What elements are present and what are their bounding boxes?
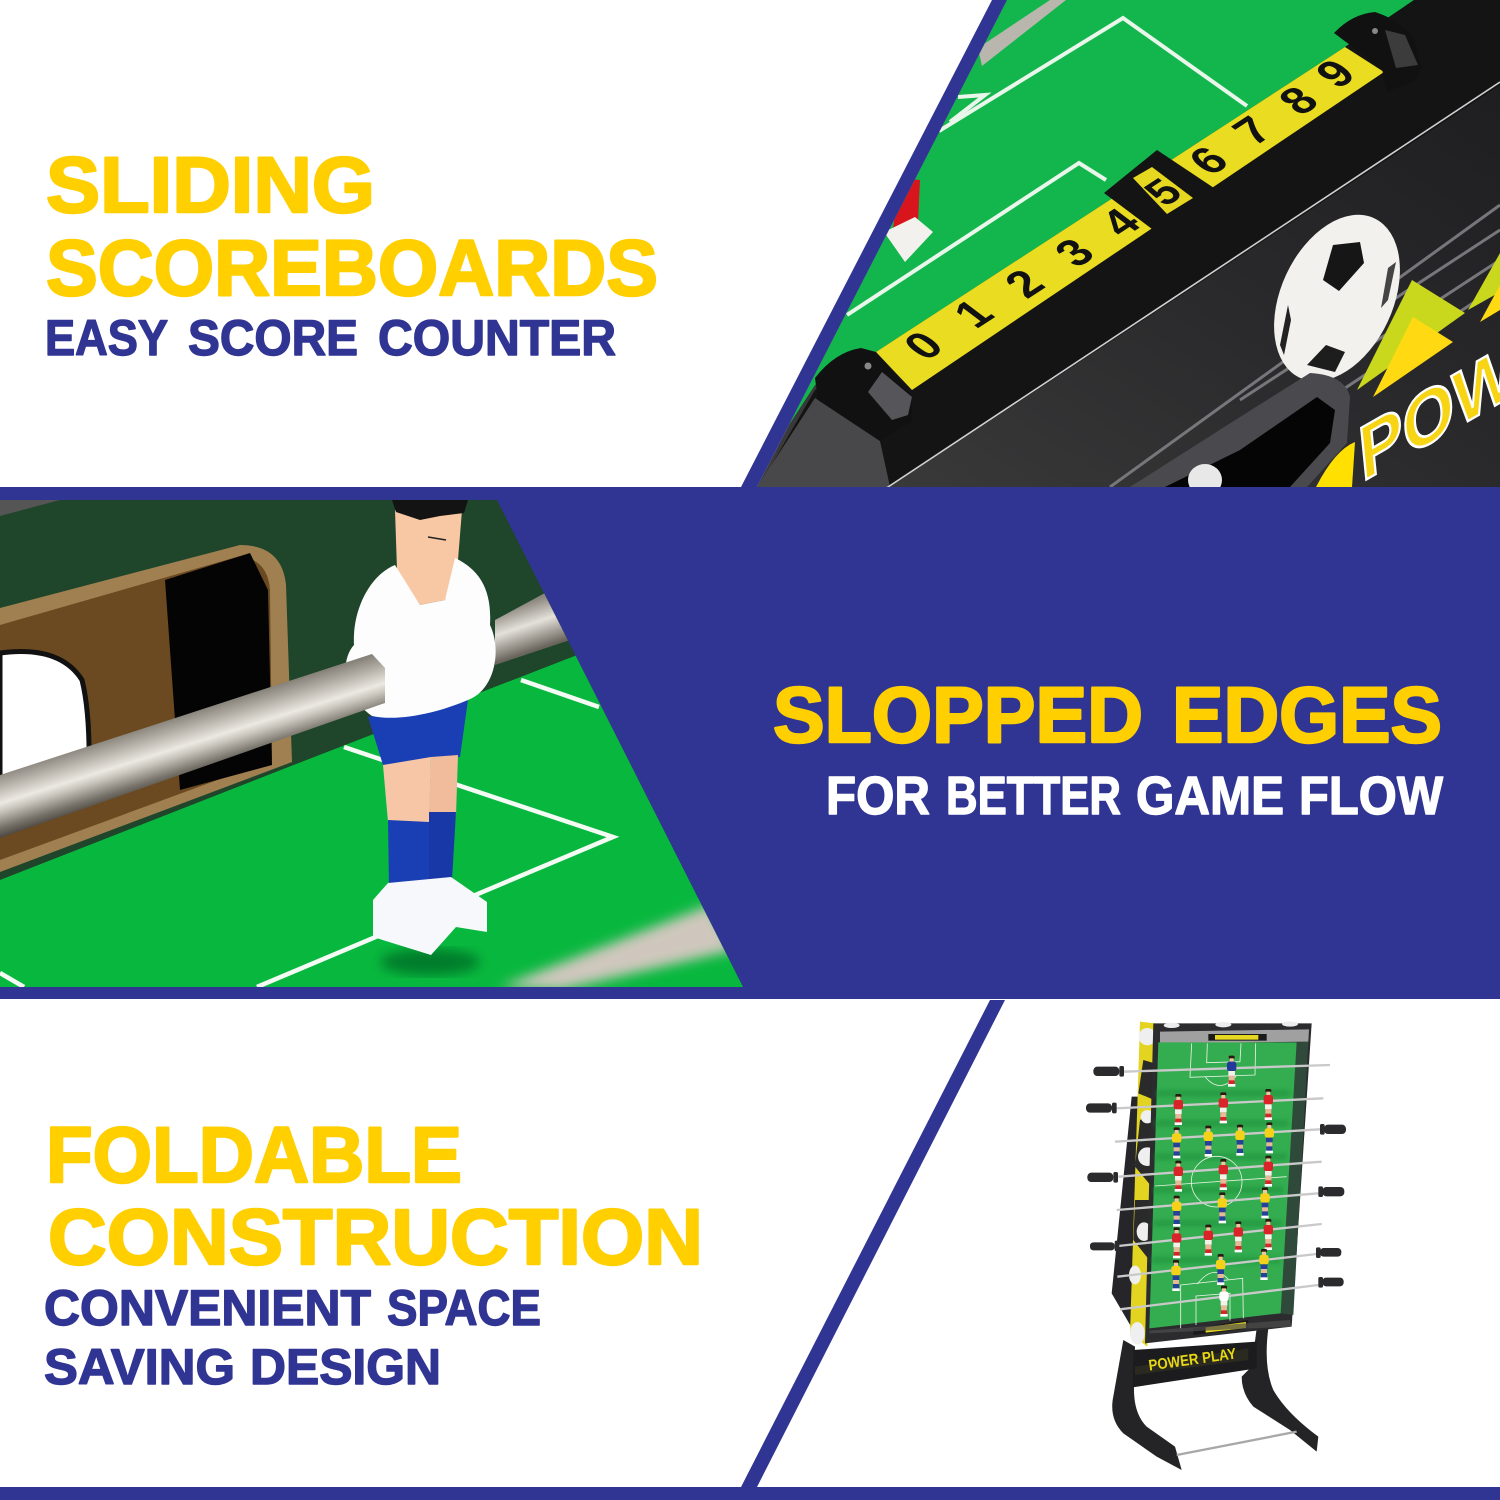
background rod [978,0,1066,66]
top scoreboard [1208,1034,1267,1041]
sliding marker on 5: 5 [1134,171,1193,214]
bottom scoreboard [1193,1320,1248,1335]
heading: sliding scoreboards [46,140,658,312]
stand legs [1112,1328,1318,1470]
bottom end panel [1149,1320,1292,1333]
subheading: easy score counter: EASY [45,310,168,366]
top diagonal stripe [741,0,1007,487]
subheading: easy score counter [45,310,616,366]
subheading: convenient space saving design: SAVING [44,1339,235,1395]
heading: slopped edges [773,670,1442,759]
yellow arc [1316,442,1355,487]
subheading: better game flow: FOR [826,766,930,826]
black rail [757,0,1500,490]
handles [1086,1066,1346,1288]
bottom band [0,1487,1500,1500]
top end grey band [1160,1029,1309,1043]
figure: socks [388,812,456,887]
strip digits: 6 [1177,138,1239,183]
subheading: convenient space saving design: CONVENIENT [44,1280,371,1336]
cardboard opening [0,545,292,872]
heading: foldable construction: FOLDABLE [46,1110,462,1199]
heading: sliding scoreboards: SLIDING [46,140,375,229]
soccer ball [1274,214,1400,378]
right inner wall [1281,1042,1308,1315]
subheading: convenient space saving design: DESIGN [250,1339,441,1395]
figure: feet [373,877,487,955]
heading: slopped edges: EDGES [1172,670,1442,759]
yellow triangles [1357,253,1500,397]
heading: foldable construction [46,1110,703,1281]
left end cap [815,348,912,441]
red player foot [884,178,933,262]
figure: head and hair [392,500,468,605]
strip digits: 3 [1043,230,1105,275]
blurred front rod [500,905,735,990]
heading: slopped edges: SLOPPED [773,670,1143,759]
yellow players [1171,1122,1274,1291]
goalkeepers [1219,1056,1236,1317]
subheading: easy score counter: COUNTER [378,310,616,366]
panel: player photo [0,500,750,990]
strip digits: 8 [1267,78,1329,123]
table frame [1145,1023,1312,1343]
foot shadow [380,949,480,975]
subheading: convenient space saving design: SPACE [387,1280,541,1336]
sliding marker on 5 [1104,150,1213,229]
strip digits: 0 [892,323,954,368]
white ball in opening [0,649,92,775]
ball decor on top edge [1164,1021,1298,1028]
dark opening interior [165,553,272,790]
subheading: easy score counter: SCORE [188,310,358,366]
field floor [0,640,750,990]
red players [1172,1089,1273,1258]
green field [1149,1042,1297,1328]
subheading: better game flow: BETTER [946,766,1121,826]
shaded stripes on field [1152,1090,1290,1263]
strip digits: 9 [1304,51,1366,96]
illustration: folded foosball table [1086,1021,1346,1470]
panel: blue band with sloped edges [0,487,1500,999]
figure: shirt [346,558,496,718]
field lines [847,18,1247,315]
yellow score strip [876,47,1384,390]
strip digits [906,62,1352,358]
metal rod right of player [495,593,570,665]
crossbar with logo [1133,1342,1257,1387]
rods [1115,1065,1330,1309]
side graphic panel [1130,1022,1155,1347]
white rail highlight [885,82,1500,489]
strip digits: 2 [993,261,1055,306]
subheading: better game flow [826,766,1443,826]
lower grey area under cap [757,398,890,487]
heading: foldable construction: CONSTRUCTION [48,1192,703,1281]
right end cap [1334,12,1418,73]
green playing field [788,0,1414,426]
field lines [1155,1043,1287,1328]
folded back panel [1112,1097,1140,1333]
graphic stripes [1110,205,1500,487]
panel: sliding scoreboards photo [740,0,1500,500]
strip digits: 1 [942,291,1004,336]
subheading: better game flow: FLOW [1299,766,1443,826]
hole in cabinet [1130,373,1350,496]
figure: shorts [368,700,468,770]
strip digits: 4 [1089,200,1151,245]
bottom diagonal stripe [741,1000,1005,1487]
foot rod [1177,1432,1297,1455]
field lines [0,680,613,987]
subheading: convenient space saving design [44,1280,541,1395]
subheading: better game flow: GAME [1136,766,1284,826]
strip digits: 7 [1221,108,1283,153]
heading: sliding scoreboards: SCOREBOARDS [46,223,658,312]
figure: legs [383,755,458,825]
metal rod [0,654,385,838]
table wall [0,500,750,990]
crossbar with logo: POWER PLAY [1148,1345,1237,1375]
